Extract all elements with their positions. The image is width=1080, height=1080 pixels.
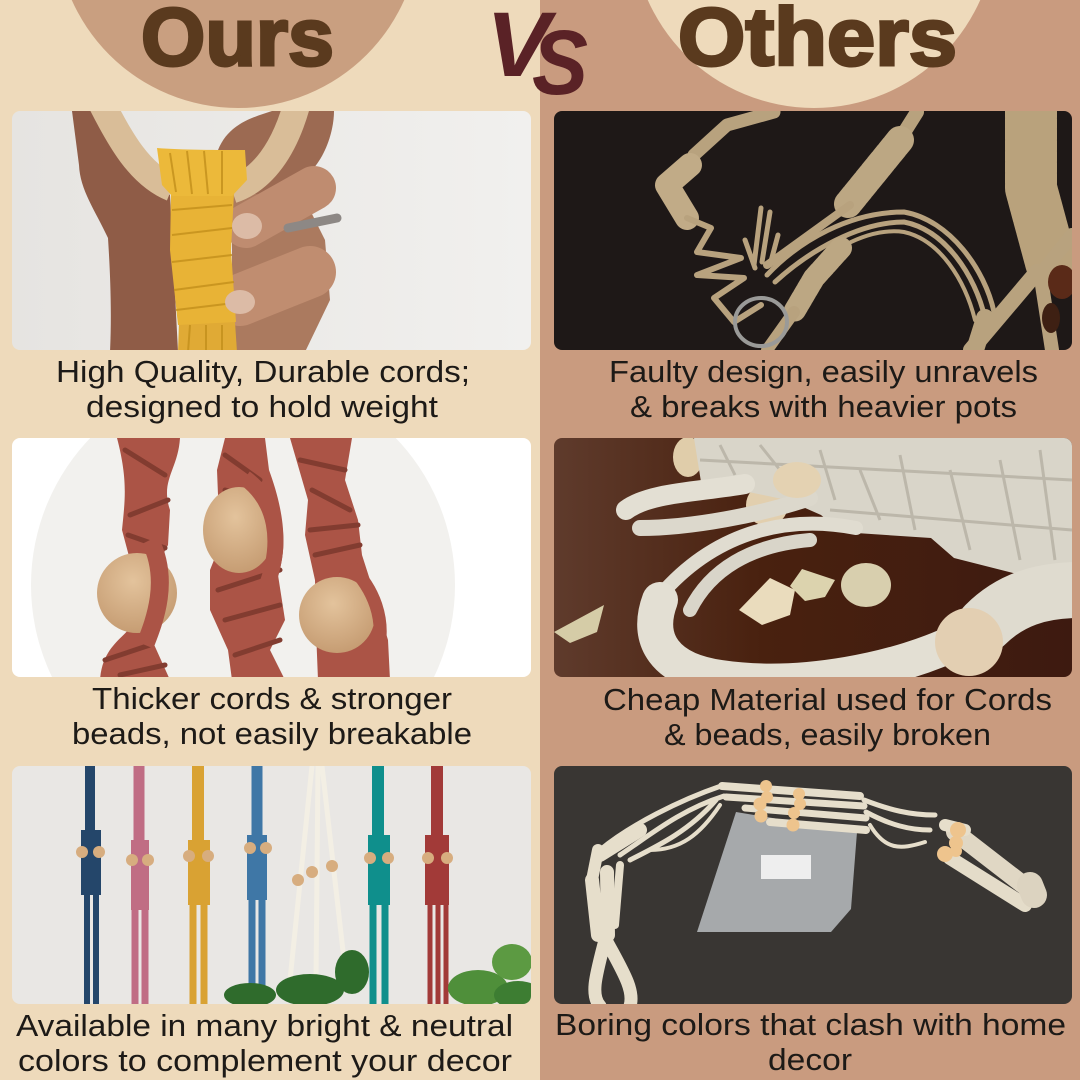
fingernails [232, 213, 262, 239]
braid two [210, 438, 285, 680]
left fan [600, 786, 721, 850]
braid one [100, 438, 180, 680]
left rope tails [626, 484, 745, 510]
macrame strand [900, 111, 924, 133]
caption: others material: Cheap Material used for Cords [603, 682, 1052, 717]
wooden ring [100, 100, 298, 190]
caption: others material: & beads, easily broken [664, 717, 991, 752]
caption: others design: & breaks with heavier pots [630, 389, 1017, 424]
fingers [240, 188, 337, 300]
top knot rows [722, 786, 860, 796]
caption: others material [603, 682, 1052, 752]
photo: unraveling jute hanger [554, 108, 1076, 350]
versus mark: S [532, 12, 588, 114]
photo: dull hanger on dark table [554, 766, 1072, 1006]
lower macrame [794, 248, 841, 312]
photo: hand holding yellow cord [12, 100, 531, 352]
rope mass [694, 438, 1072, 575]
yellow cord [178, 322, 237, 352]
caption: ours strength [72, 681, 472, 751]
braid three [290, 438, 390, 680]
caption: ours colors [16, 1008, 513, 1078]
metal ring [735, 298, 787, 346]
caption: ours quality: designed to hold weight [86, 389, 438, 424]
lower loop [665, 524, 856, 590]
photo: colorful plant hangers [12, 766, 542, 1009]
caption: others colors: Boring colors that clash with home [555, 1007, 1066, 1042]
left column [592, 880, 598, 935]
bag label [761, 855, 811, 879]
hand: left palm [72, 111, 178, 352]
caption: others colors: decor [768, 1042, 852, 1077]
caption: ours strength: beads, not easily breakable [72, 716, 472, 751]
panel: others background [540, 0, 1080, 1080]
right macrame [1031, 108, 1051, 262]
caption: others colors [555, 1007, 1066, 1077]
versus mark [486, 0, 588, 114]
caption: ours quality: High Quality, Durable cords; [56, 354, 470, 389]
frayed strand [694, 112, 774, 155]
caption: ours strength: Thicker cords & stronger [92, 681, 452, 716]
wooden beads [754, 780, 966, 862]
header circle: ours [56, 0, 420, 108]
braid shading [105, 450, 360, 675]
arch strands [767, 212, 994, 312]
whole bead [935, 608, 1003, 676]
plants [224, 944, 531, 1004]
bottom loop [595, 940, 605, 1006]
caption: ours colors: Available in many bright & neutral [16, 1008, 513, 1043]
header circle: others [632, 0, 996, 108]
wood beads [1048, 265, 1072, 299]
panel: ours background [0, 0, 540, 1080]
right fan [864, 800, 935, 815]
beads behind rope [673, 438, 700, 477]
wooden beads [97, 553, 177, 633]
plastic bag [697, 812, 857, 932]
caption: others design [609, 354, 1038, 424]
photo: broken beads and rope [554, 437, 1080, 682]
broken bead pieces [773, 462, 821, 498]
right column [955, 832, 1030, 890]
caption: ours colors: colors to complement your decor [18, 1043, 512, 1078]
caption: others design: Faulty design, easily unravels [609, 354, 1038, 389]
hand: upper fingers [218, 111, 334, 195]
caption: ours quality [56, 354, 470, 424]
photo: braided cords and beads [12, 438, 531, 677]
hand: right palm [232, 190, 330, 352]
